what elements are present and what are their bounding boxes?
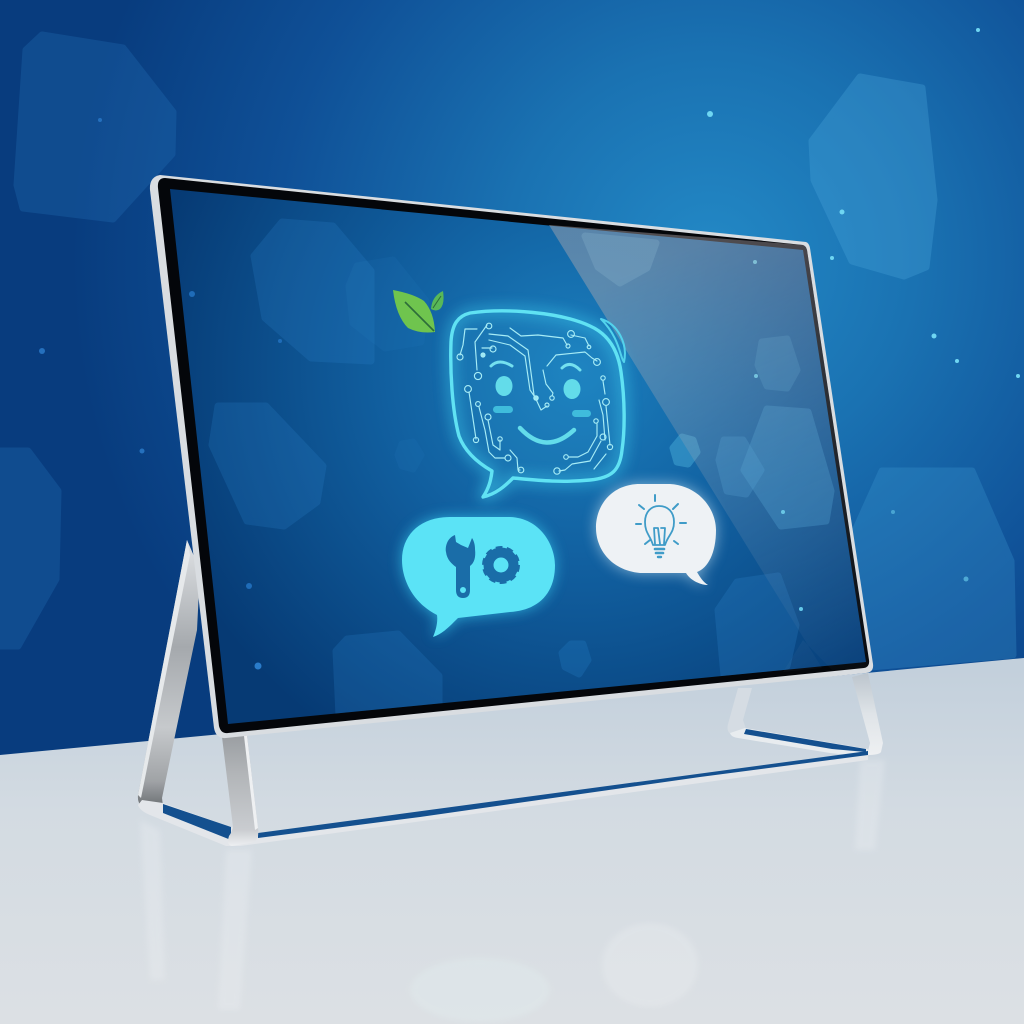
bubble outline glow xyxy=(451,311,624,497)
table reflections xyxy=(140,760,885,1022)
white idea bubble xyxy=(596,484,716,585)
circuit traces xyxy=(457,323,613,474)
bubble body xyxy=(596,484,716,585)
face xyxy=(491,362,591,443)
bubble glow xyxy=(402,517,555,637)
bubble glow xyxy=(596,484,716,585)
bubble outline xyxy=(451,311,624,497)
background dots xyxy=(39,28,1020,582)
icon: gear xyxy=(484,548,518,582)
signal arc xyxy=(601,319,625,362)
back stand xyxy=(728,673,883,757)
screen dots xyxy=(189,260,803,670)
monitor silver frame xyxy=(150,175,873,738)
bubble inner tint xyxy=(451,311,624,497)
monitor black bezel xyxy=(158,178,869,733)
screen hexagons xyxy=(212,222,831,716)
base foot xyxy=(138,751,868,846)
chatbot face bubble xyxy=(451,311,625,497)
icon: leaves xyxy=(393,290,444,332)
background hexagons xyxy=(0,35,1013,668)
monitor xyxy=(150,170,890,750)
background wall xyxy=(0,0,1024,780)
table surface xyxy=(0,658,1024,1024)
front stand leg xyxy=(222,735,258,846)
icon: wrench xyxy=(446,535,475,598)
icon: light bulb xyxy=(636,495,686,557)
screen reflection xyxy=(549,225,869,672)
left stand leg xyxy=(138,540,200,808)
cyan tools bubble xyxy=(402,517,555,637)
screen xyxy=(170,189,866,724)
bubble body xyxy=(402,517,555,637)
